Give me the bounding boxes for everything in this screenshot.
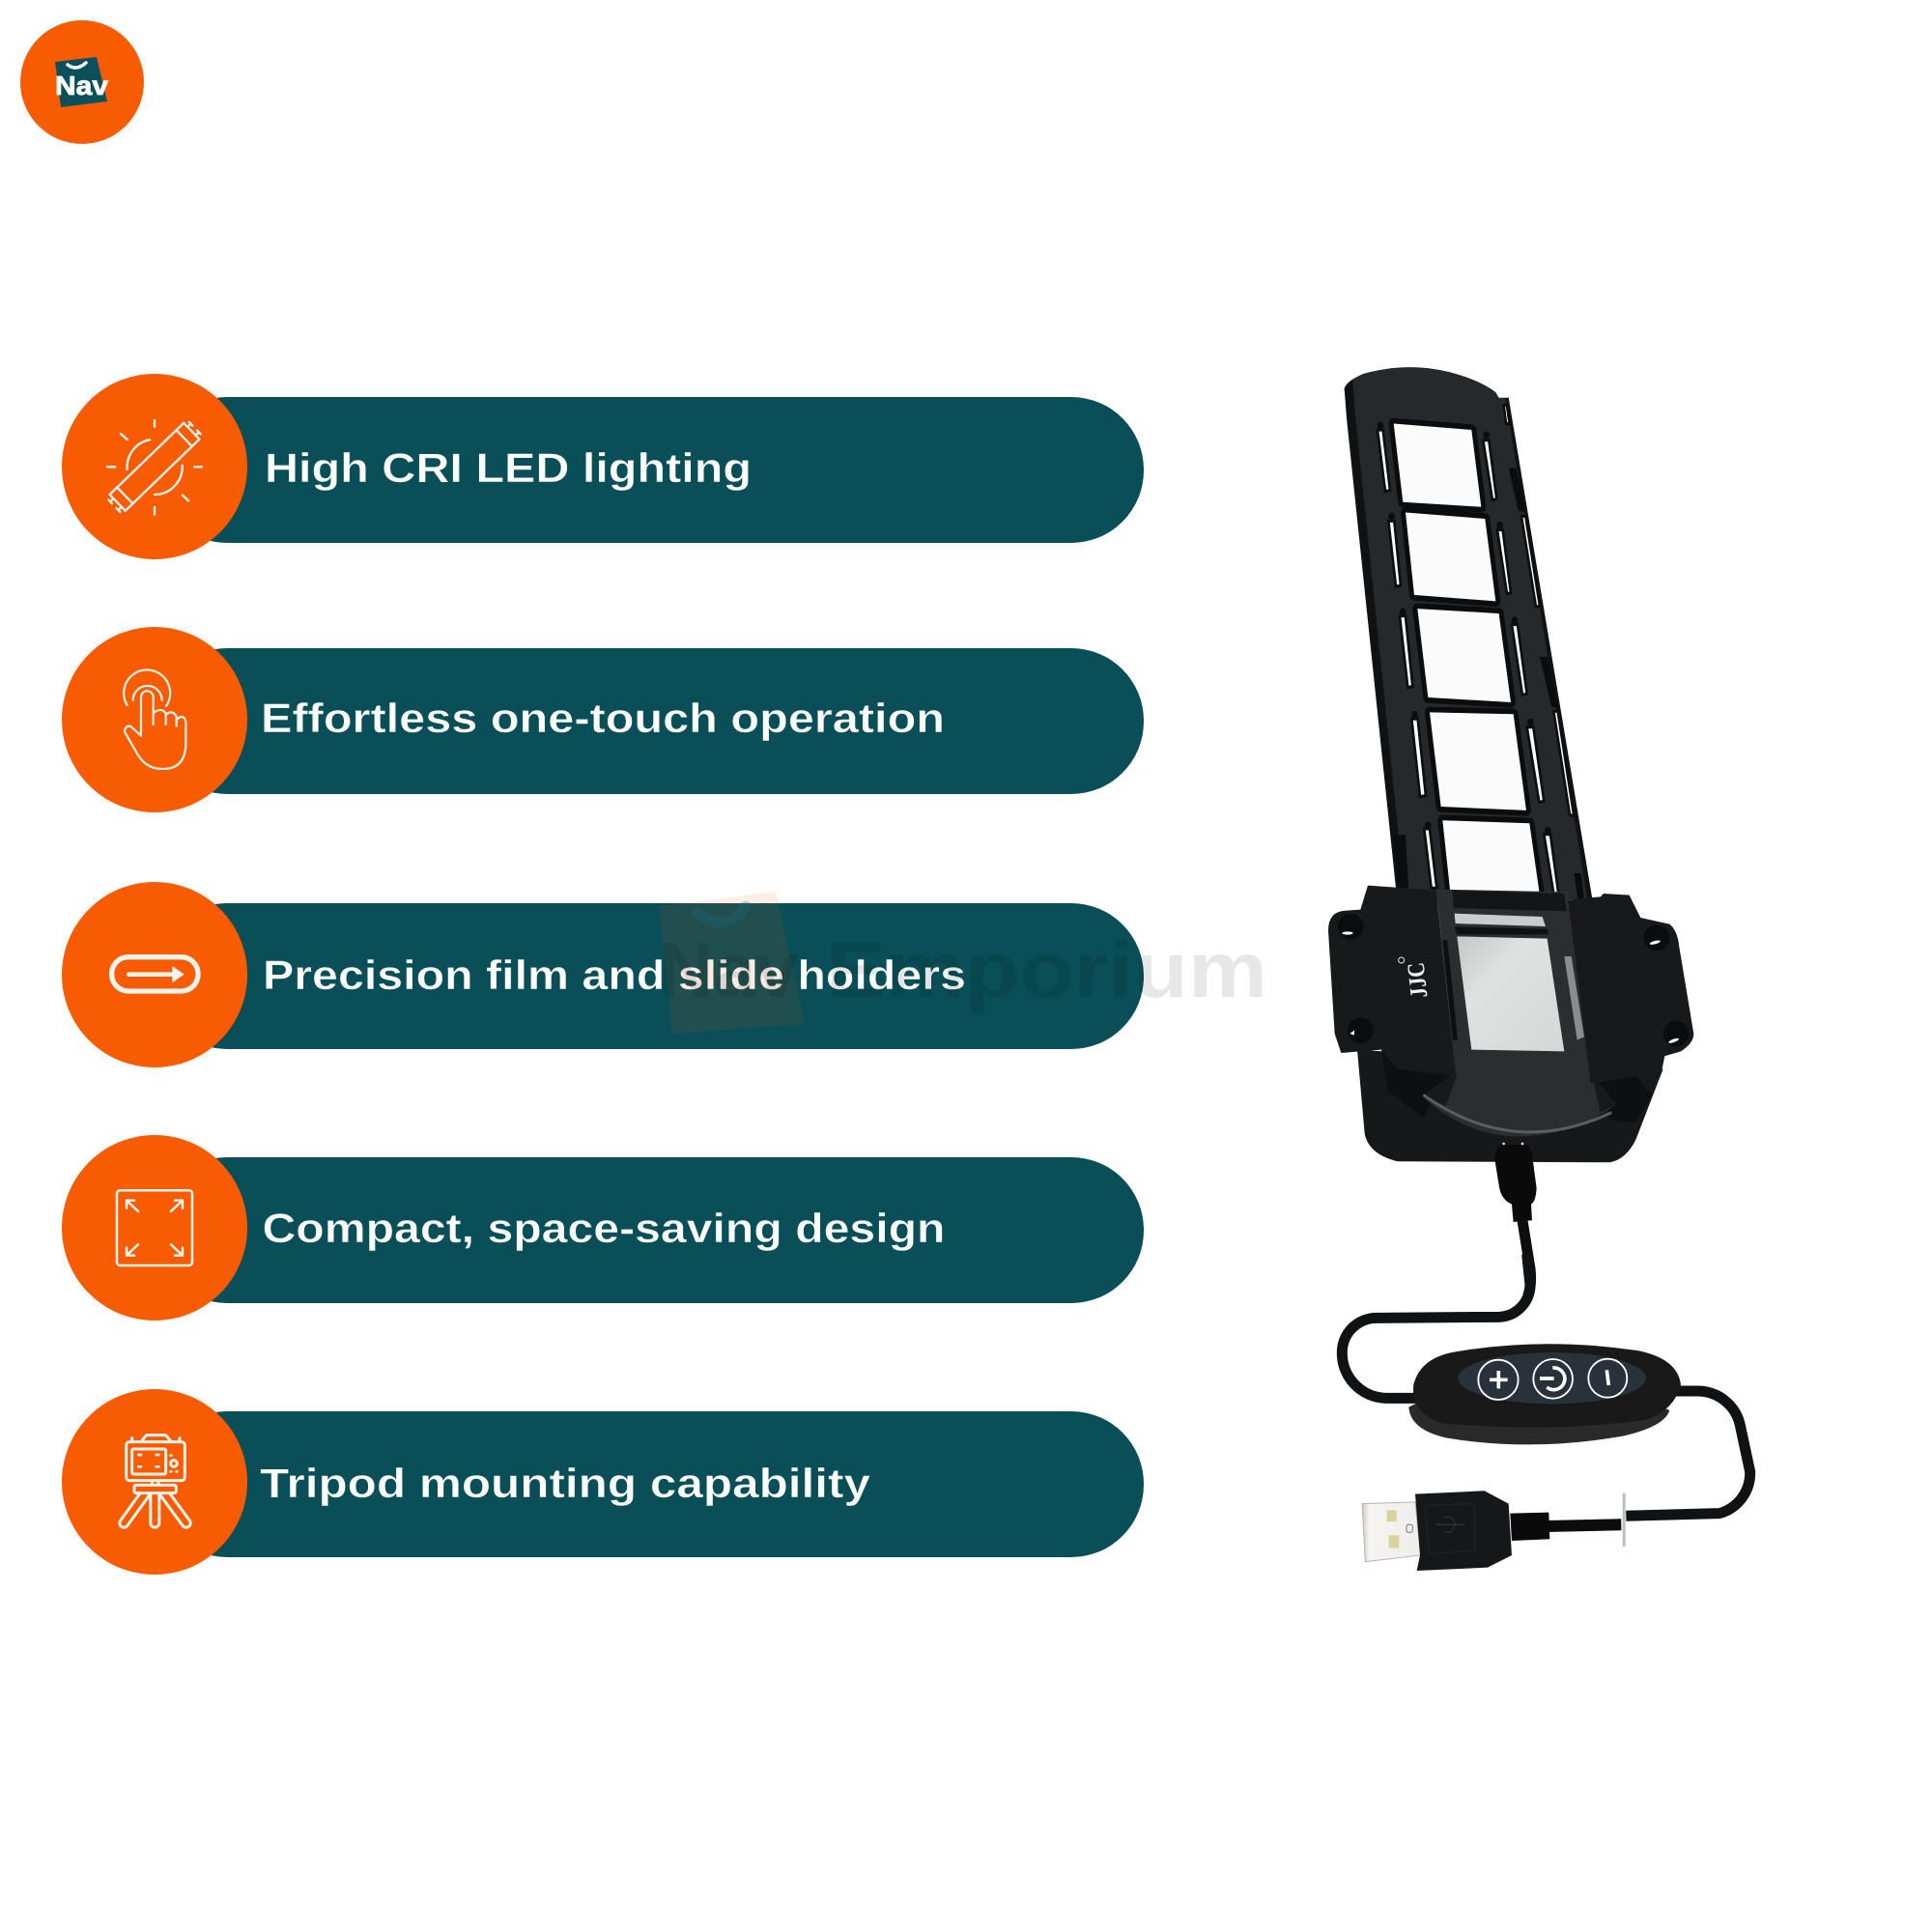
product photo: film holder strip — [1345, 367, 1592, 903]
product photo: light base — [1328, 886, 1693, 1296]
feature row: Tripod mounting capability: Tripod mounting capability — [260, 1461, 870, 1507]
feature row: Precision film and slide holders — [62, 882, 1144, 1067]
feature row: High CRI LED lighting: High CRI LED lighting — [265, 445, 752, 492]
feature row: High CRI LED lighting — [62, 374, 1144, 559]
film windows — [1394, 424, 1540, 895]
feature row: Precision film and slide holders: Precision film and slide holders — [263, 952, 966, 999]
logo badge — [20, 20, 144, 144]
logo badge: Nav — [55, 71, 108, 100]
cable — [1342, 1254, 1530, 1398]
right mount plate — [1568, 894, 1693, 1084]
icon: touching hand — [124, 669, 185, 769]
sprocket slits — [1378, 405, 1574, 894]
feature row: Tripod mounting capability — [62, 1389, 1144, 1575]
icon: film holder arrow — [112, 957, 198, 991]
brand mark: JJC — [1403, 961, 1433, 999]
watermark — [659, 892, 1267, 1034]
icon: LED tube with sun rays — [106, 420, 203, 515]
left mount plate — [1328, 886, 1456, 1070]
feature row: Effortless one-touch operation: Effortless one-touch operation — [261, 696, 945, 742]
watermark: Nav — [659, 926, 798, 1014]
icon: expand square — [117, 1190, 192, 1265]
feature row: Compact, space-saving design: Compact, space-saving design — [263, 1206, 945, 1252]
product photo: cable, remote and USB plug — [1342, 1254, 1750, 1571]
cable connector — [1494, 1145, 1537, 1222]
slide carrier — [1423, 890, 1616, 1137]
inline dimmer remote — [1408, 1344, 1681, 1444]
feature row: Effortless one-touch operation — [62, 627, 1144, 812]
icon: camera on tripod — [124, 1435, 186, 1523]
feature row: Compact, space-saving design — [62, 1135, 1144, 1321]
watermark: Emporium — [826, 926, 1267, 1014]
USB plug — [1362, 1491, 1549, 1571]
